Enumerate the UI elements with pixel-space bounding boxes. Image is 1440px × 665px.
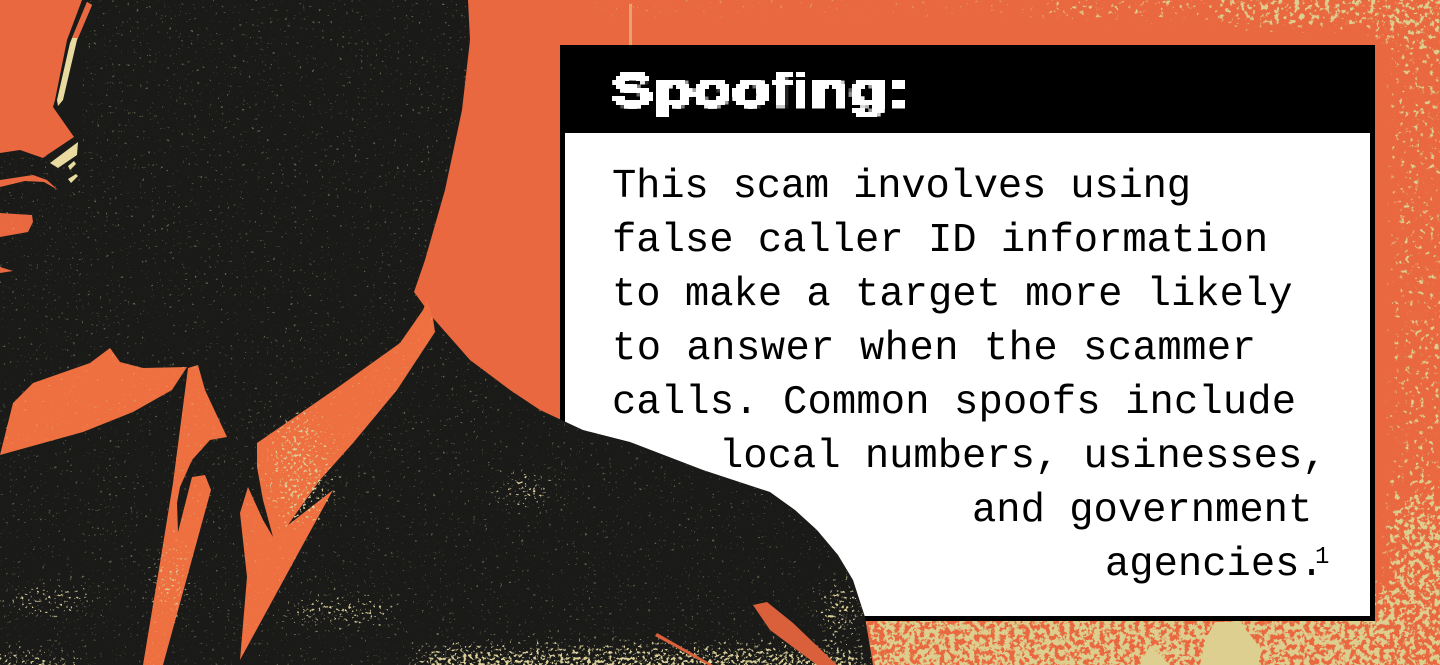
highlight: nose bbox=[50, 142, 78, 168]
text block: description: calls. Common spoofs include bbox=[612, 380, 1296, 426]
figure silhouette bbox=[0, 0, 873, 665]
text block: description: and government bbox=[972, 488, 1312, 534]
hand: finger gaps bbox=[0, 175, 58, 273]
highlight: lips bbox=[68, 161, 78, 183]
text block: description: This scam involves using bbox=[612, 164, 1191, 210]
collar left bbox=[0, 348, 187, 455]
text block: description: false caller ID information bbox=[612, 218, 1268, 264]
collar right bbox=[240, 300, 435, 660]
illustration: silhouette of man on a phone bbox=[0, 0, 880, 665]
text block: description: 1 bbox=[1315, 544, 1329, 571]
text block: description: local numbers, usinesses, bbox=[719, 434, 1327, 480]
highlight: forehead bbox=[57, 2, 92, 106]
text block: description: agencies. bbox=[1105, 542, 1324, 588]
panel: spoofing card bbox=[560, 45, 1375, 621]
highlight: forehead upper tint bbox=[72, 2, 92, 38]
jacket stripes bbox=[655, 602, 837, 665]
text block: description: to answer when the scammer bbox=[612, 326, 1256, 372]
heading: Spoofing: bbox=[611, 63, 909, 116]
text block: description bbox=[612, 164, 1329, 588]
text block: description: to make a target more likely bbox=[612, 272, 1293, 318]
background: distressed orange texture bbox=[596, 0, 1440, 665]
shirt with tie edge bbox=[143, 365, 227, 665]
speckle on silhouette bbox=[0, 0, 880, 665]
